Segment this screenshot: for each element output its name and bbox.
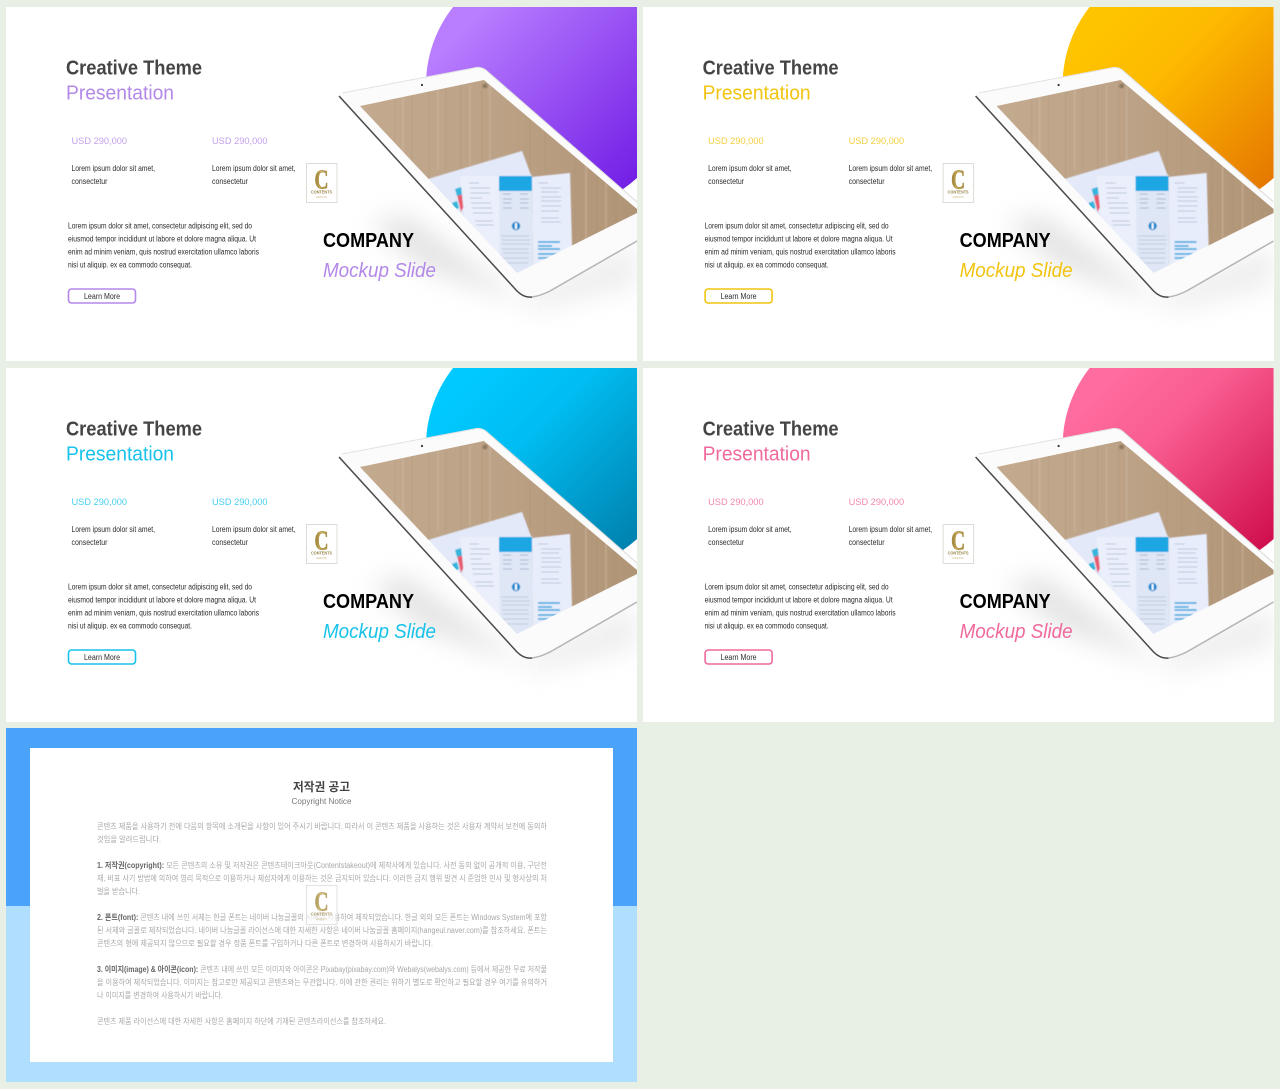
company label [960,591,1073,643]
heading [703,418,839,466]
section 1: copyright: 1. 저작권(copyright): 모든 콘텐츠의 소유 및 저작권은 콘텐츠테이크아웃(Contentstakeout)에 제작사에게 있습니다. 사전 동의 없이 공개적 이용, 구단전 [97,860,547,870]
tablet mockup [339,67,640,312]
body paragraph: Lorem ipsum dolor sit amet, consectetur adipiscing elit, sed do [68,222,252,230]
license note: 콘텐츠 제품 라이선스에 대한 자세한 사항은 홈페이지 하단에 기재된 콘텐츠라이선스를 참조하세요. [97,1016,386,1026]
price column 2: USD 290,000 [849,136,904,147]
section 3: image and icon: 나 이미지를 변경하여 사용하시기 바랍니다. [97,990,223,1000]
price column 1: USD 290,000 [72,497,127,508]
heading [66,58,202,104]
company label: COMPANY [323,230,415,252]
body paragraph: Lorem ipsum dolor sit amet, consectetur adipiscing elit, sed do [705,222,889,230]
price column 1: consectetur [72,177,108,186]
section 2: font: 2. 폰트(font): 콘텐츠 내에 쓰인 서체는 한글 폰트는 네이버 나눔글꼴의 서체를 사용하여 제작되었습니다. 한글 외의 모든 폰트는 Windows System에 포함 [97,912,548,922]
company label [960,230,1073,282]
body paragraph: eiusmod tempor incididunt ut labore et dolore magna aliqua. Ut [68,596,257,604]
company label: COMPANY [960,591,1051,613]
price column 1: Lorem ipsum dolor sit amet, [708,164,792,173]
section 1: copyright [97,860,547,896]
body paragraph [705,582,896,630]
button: learn more: Learn More [84,292,120,301]
price column 2: USD 290,000 [849,497,904,508]
panel: purple slide [6,0,678,361]
tablet mockup [339,428,640,673]
price column 2: consectetur [849,538,885,547]
button: learn more: Learn More [721,292,757,301]
price column 2 [849,136,932,186]
heading [66,418,202,466]
decorative gradient circle [1062,368,1274,550]
heading: Creative Theme [66,418,202,440]
decorative gradient circle [1062,7,1274,189]
intro text: 콘텐츠 제품을 사용하기 전에 다음의 항목에 소개된을 사항이 있어 주시기 바랍니다. 따라서 이 콘텐츠 제품을 사용하는 것은 사용자 계약서 보전에 동의하 [97,821,548,831]
intro text [97,821,548,844]
notice title: Copyright Notice [292,796,352,806]
panel: pink slide [643,368,1274,722]
section 3: image and icon [97,964,547,1000]
button: learn more: Learn More [721,653,757,662]
price column 2: Lorem ipsum dolor sit amet, [849,525,932,534]
section 3: image and icon: 을 이용하여 제작되었습니다. 이미지는 참고로만 제공되고 콘텐츠와는 무관합니다. 이에 관한 권리는 위하기 별도로 확인하고 필요할 경우 여기를 유의하거 [97,977,547,987]
section 1: copyright: 벌을 받습니다. [97,886,140,896]
notice title [292,779,352,806]
company label: Mockup Slide [960,260,1073,282]
company label: COMPANY [323,591,415,613]
price column 1: USD 290,000 [708,497,764,508]
heading: Creative Theme [66,58,202,80]
logo badge [306,524,337,564]
tablet mockup [975,428,1277,673]
logo badge [306,164,337,202]
button: learn more [705,650,772,664]
body paragraph [68,222,259,270]
price column 1 [72,497,155,547]
button: learn more [68,289,136,303]
logo badge [943,164,974,202]
price column 1: consectetur [708,177,744,186]
notice title: 저작권 공고 [293,779,350,794]
panel: cyan slide [6,368,637,722]
heading: Presentation [703,444,811,466]
company label: Mockup Slide [960,621,1073,643]
body paragraph: enim ad minim veniam, quis nostrud exercitation ullamco laboris [68,248,259,256]
price column 1: Lorem ipsum dolor sit amet, [708,525,792,534]
section 2: font: 콘텐츠의 형에 제공되지 않으므로 필요할 경우 정품 폰트를 구입하거나 다른 폰트로 변경하여 사용하시기 바랍니다. [97,938,433,948]
panel: yellow slide [643,0,1280,361]
tablet mockup [975,67,1277,312]
price column 2: Lorem ipsum dolor sit amet, [212,164,296,173]
body paragraph: enim ad minim veniam, quis nostrud exercitation ullamco laboris [705,248,896,256]
body paragraph [705,222,896,270]
heading: Creative Theme [703,58,839,80]
decorative gradient circle [426,368,637,550]
price column 1 [72,136,155,186]
price column 2: USD 290,000 [212,497,268,508]
price column 1: USD 290,000 [72,136,127,147]
price column 1: consectetur [708,538,744,547]
heading [703,58,839,104]
button: learn more [68,650,136,664]
heading: Presentation [66,444,174,466]
price column 1: Lorem ipsum dolor sit amet, [72,525,155,534]
body paragraph: eiusmod tempor incididunt ut labore et dolore magna aliqua. Ut [68,234,257,244]
body paragraph: Lorem ipsum dolor sit amet, consectetur adipiscing elit, sed do [705,582,889,592]
body paragraph: eiusmod tempor incididunt ut labore et dolore magna aliqua. Ut [705,596,893,604]
company label: Mockup Slide [323,260,436,282]
body paragraph: nisi ut aliquip. ex ea commodo consequat. [68,260,192,270]
price column 2: Lorem ipsum dolor sit amet, [212,525,296,534]
body paragraph: nisi ut aliquip. ex ea commodo consequat. [68,622,192,630]
logo badge [306,886,337,924]
section 2: font: 된 서체와 글꼴로 제작되었습니다. 네이버 나눔글꼴 라이선스에 대한 자세한 사항은 네이버 나눔글꼴 홈페이지(hangeul.naver.com)를 참조하세요. 폰트는 [97,925,547,935]
price column 2 [849,497,932,547]
body paragraph: nisi ut aliquip. ex ea commodo consequat. [705,260,829,270]
company label [323,230,436,282]
heading: Creative Theme [703,418,839,440]
heading: Presentation [703,82,811,104]
body paragraph: nisi ut aliquip. ex ea commodo consequat. [705,622,829,630]
price column 2 [212,136,296,186]
price column 2 [212,497,296,547]
price column 2: USD 290,000 [212,136,268,147]
button: learn more [705,289,772,303]
heading: Presentation [66,82,174,104]
price column 1: USD 290,000 [708,136,764,147]
logo badge [943,524,974,564]
button: learn more: Learn More [84,653,120,662]
price column 2: consectetur [849,177,885,186]
body paragraph: Lorem ipsum dolor sit amet, consectetur adipiscing elit, sed do [68,582,252,592]
company label [323,591,436,643]
price column 1: Lorem ipsum dolor sit amet, [72,164,155,173]
panel: copyright notice [6,728,637,1082]
price column 2: consectetur [212,538,248,547]
price column 2: Lorem ipsum dolor sit amet, [849,164,932,173]
price column 1: consectetur [72,538,108,547]
price column 1 [708,497,792,547]
body paragraph: enim ad minim veniam, quis nostrud exercitation ullamco laboris [68,608,259,618]
company label: Mockup Slide [323,621,436,643]
price column 2: consectetur [212,177,248,186]
section 2: font [97,912,548,948]
body paragraph: enim ad minim veniam, quis nostrud exercitation ullamco laboris [705,608,896,618]
section 1: copyright: 재, 비표 사기 방법에 의하여 영리 목적으로 이용하거나 제삼자에게 이용하는 것은 금지되어 있습니다. 이러한 금지 행위 발견 시 준엄한 민사 및 형사상의 처 [97,873,547,883]
intro text: 것임을 알려드립니다. [97,834,161,844]
decorative gradient circle [426,7,637,189]
body paragraph [68,582,259,630]
body paragraph: eiusmod tempor incididunt ut labore et dolore magna aliqua. Ut [705,234,893,244]
price column 1 [708,136,792,186]
company label: COMPANY [960,230,1051,252]
section 3: image and icon: 3. 이미지(image) & 아이콘(icon): 콘텐츠 내에 쓰인 모든 이미지와 아이콘은 Pixabay(pixabay.com)와 Webalys(webalys.com) 등에서 제공한 무료 저작물 [97,964,547,974]
